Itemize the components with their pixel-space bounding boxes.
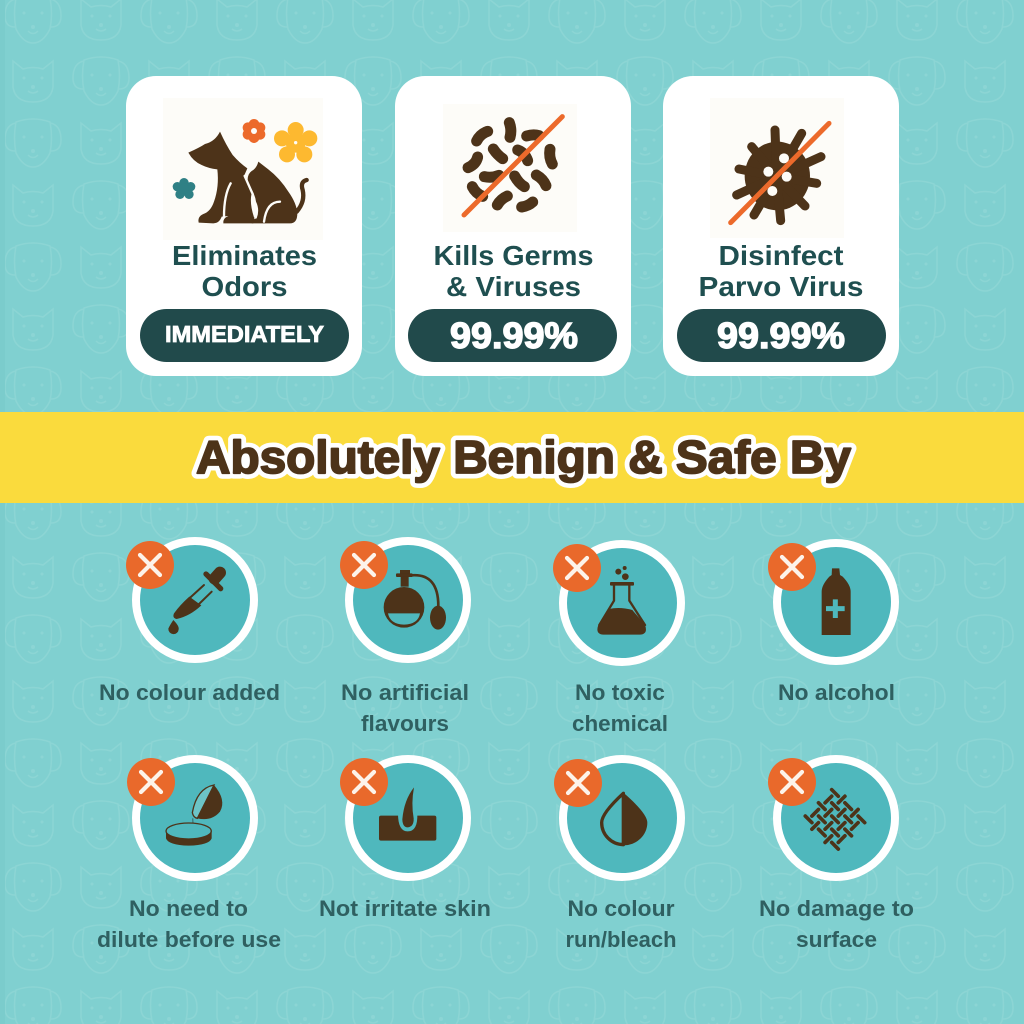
badge: cross (340, 758, 388, 806)
badge: cross (553, 544, 601, 592)
item: no alcohol (768, 543, 895, 705)
label: Not irritate skin (319, 896, 491, 921)
icon: sanitizer bottle (822, 568, 851, 635)
title: Absolutely Benign & Safe By (196, 431, 851, 483)
heading line 2: Odors (202, 271, 288, 302)
item: no artificial flavours (340, 541, 469, 736)
icon: hair follicle (379, 787, 436, 841)
panel: disinfect parvo virus (663, 76, 899, 376)
panel: kills germs and viruses (395, 76, 631, 376)
label: chemical (572, 711, 668, 736)
badge: cross (126, 541, 174, 589)
heading: kills germs: Kills Germs (434, 240, 594, 271)
label: No need to (129, 896, 248, 921)
heading line 2: & Viruses (446, 271, 581, 302)
icon: dog, cat and flowers (173, 119, 317, 223)
icon: half drop (602, 793, 647, 845)
pill: 99.99%: 99.99% (717, 315, 845, 356)
pill: immediately: IMMEDIATELY (165, 321, 324, 347)
label: dilute before use (97, 927, 281, 952)
icon: crossed germs (464, 117, 562, 215)
label: No alcohol (778, 680, 895, 705)
pill: immediately (140, 309, 349, 362)
label: No colour (568, 896, 675, 921)
icon: crossed virus (731, 123, 829, 223)
item: no need to dilute (97, 758, 281, 952)
badge: cross (768, 543, 816, 591)
label: flavours (361, 711, 449, 736)
label: run/bleach (566, 927, 676, 952)
pill: 99.99% (408, 309, 617, 362)
badge: cross (768, 758, 816, 806)
heading: eliminates odors: Eliminates (172, 240, 317, 271)
icon: woven fabric (802, 786, 868, 852)
icon: flask (597, 566, 646, 635)
label: No colour added (99, 680, 280, 705)
label: No toxic (575, 680, 665, 705)
heading line 2: Parvo Virus (698, 271, 864, 302)
label (97, 896, 281, 952)
badge: cross (127, 758, 175, 806)
panel: eliminates odors (126, 76, 362, 376)
item: not irritate skin (319, 758, 491, 921)
pill: 99.99%: 99.99% (450, 315, 578, 356)
label (341, 680, 469, 736)
badge: cross (554, 759, 602, 807)
title: Absolutely Benign & Safe By (196, 431, 851, 483)
label: surface (796, 927, 877, 952)
label: No damage to (759, 896, 914, 921)
icon: dropper (168, 573, 221, 634)
pill: 99.99% (677, 309, 886, 362)
icon: perfume bottle (384, 570, 446, 630)
item: no toxic chemical (553, 544, 681, 736)
item: no colour run or bleach (554, 759, 681, 952)
banner (0, 412, 1024, 503)
label (572, 680, 668, 736)
item: no colour added (99, 541, 280, 705)
label (759, 896, 914, 952)
icon: pouring dish (166, 785, 222, 846)
heading: disinfect: Disinfect (718, 240, 844, 271)
item: no damage to surface (759, 758, 914, 952)
badge: cross (340, 541, 388, 589)
label: No artificial (341, 680, 469, 705)
label (566, 896, 676, 952)
